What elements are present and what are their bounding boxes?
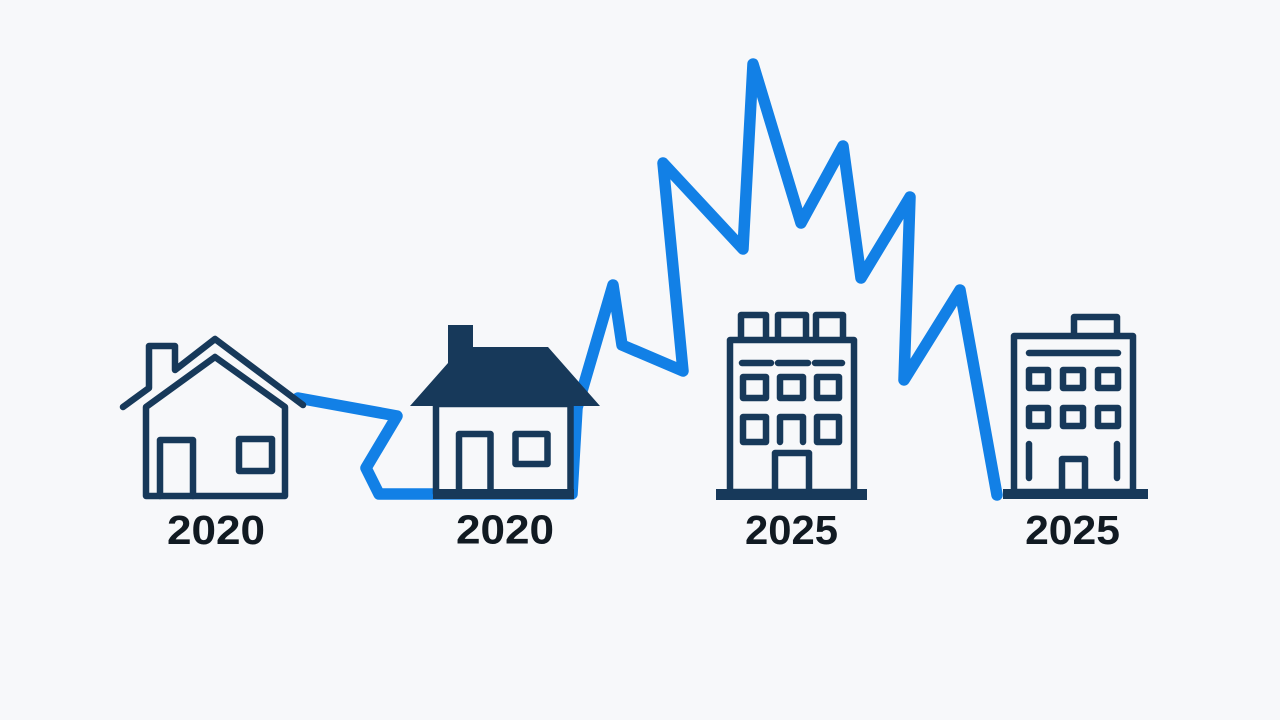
- icon: apartment building with rooftop units 2025: [716, 315, 867, 500]
- label: 2020 second house: 2020: [456, 507, 554, 553]
- blue price line: [298, 64, 997, 495]
- icon: outlined house 2020: [123, 339, 303, 496]
- label: 2025 first building: 2025: [745, 507, 838, 553]
- label: 2025 second building: 2025: [1025, 507, 1120, 553]
- label: 2020 first house: 2020: [167, 507, 265, 554]
- icon: filled roof house 2020: [410, 325, 600, 494]
- icon: tower building 2025: [1003, 317, 1148, 499]
